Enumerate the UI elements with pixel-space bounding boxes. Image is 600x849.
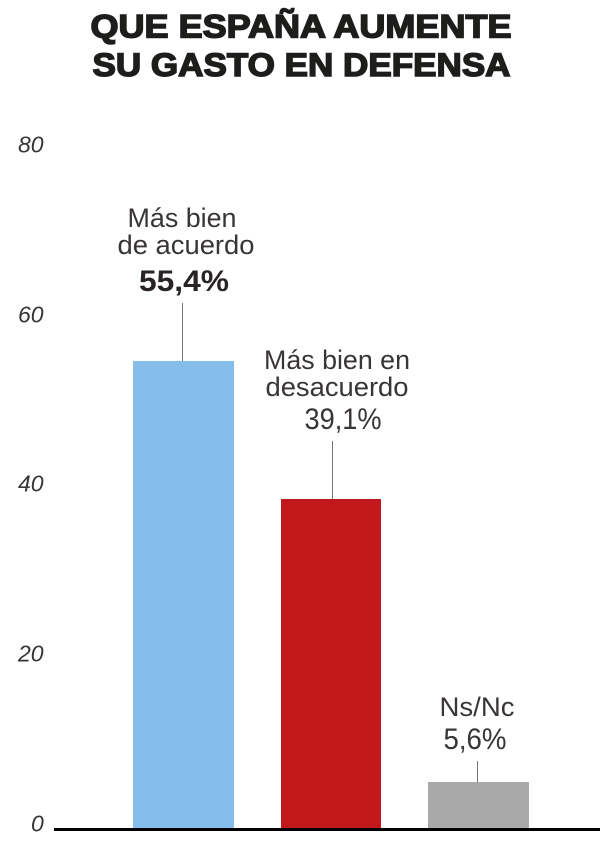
y axis labels: 60	[18, 302, 44, 328]
label: más bien en desacuerdo 39,1%: desacuerdo	[266, 372, 408, 402]
x axis baseline	[54, 828, 600, 831]
label: más bien en desacuerdo 39,1%	[264, 345, 410, 436]
title: QUE ESPAÑA AUMENTE	[90, 8, 512, 44]
label: más bien en desacuerdo 39,1%: 39,1%	[304, 403, 382, 436]
label: más bien de acuerdo 55,4%	[118, 203, 254, 298]
title: SU GASTO EN DEFENSA	[92, 47, 510, 83]
title	[90, 8, 512, 83]
bar: ns/nc	[428, 782, 529, 828]
y axis labels: 80	[18, 132, 44, 158]
label: más bien de acuerdo 55,4%: Más bien	[128, 203, 236, 233]
leader line: ns/nc	[476, 761, 478, 782]
y axis labels	[17, 132, 44, 836]
label: más bien de acuerdo 55,4%: 55,4%	[139, 265, 229, 298]
y axis labels: 40	[18, 470, 44, 496]
label: ns/nc 5,6%: Ns/Nc	[440, 692, 514, 722]
label: más bien de acuerdo 55,4%: de acuerdo	[118, 230, 254, 260]
label: ns/nc 5,6%: 5,6%	[444, 723, 506, 756]
bar: más bien de acuerdo	[133, 361, 234, 828]
leader line: más bien en desacuerdo	[332, 441, 334, 499]
y axis labels: 0	[31, 810, 44, 836]
leader line: más bien de acuerdo	[182, 303, 184, 361]
bar: más bien en desacuerdo	[281, 499, 381, 828]
label: ns/nc 5,6%	[440, 692, 514, 756]
y axis labels: 20	[17, 640, 44, 666]
label: más bien en desacuerdo 39,1%: Más bien en	[264, 345, 410, 375]
